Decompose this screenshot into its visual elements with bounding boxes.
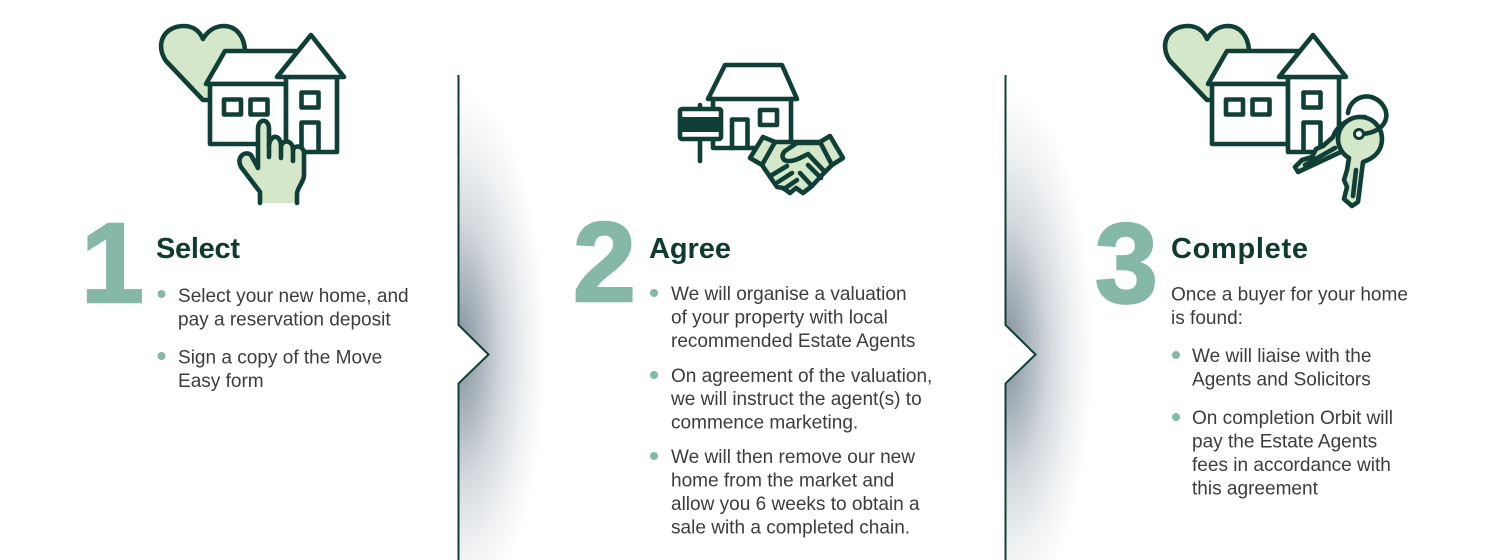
intro text: is found:	[1171, 308, 1243, 329]
bullet list: select: Easy form	[178, 371, 264, 392]
bullet list: select: Select your new home, and	[178, 286, 409, 307]
bullet list: agree: commence marketing.	[671, 412, 858, 434]
bullet list: select	[158, 286, 409, 392]
bullet list: agree: We will then remove our new	[671, 447, 915, 468]
bullet list: complete: this agreement	[1192, 478, 1319, 500]
bullet list: complete: fees in accordance with	[1192, 455, 1391, 476]
number 2: 2	[573, 199, 636, 325]
bullet list: agree	[650, 284, 932, 538]
bullet list: agree: On agreement of the valuation,	[671, 366, 932, 387]
bullet list: select: Sign a copy of the Move	[178, 348, 382, 368]
bullet list: agree: sale with a completed chain.	[671, 518, 910, 538]
heading: Complete: Complete	[1171, 233, 1308, 265]
icon: house, sale board and handshake	[680, 65, 843, 193]
bullet list: complete: Agents and Solicitors	[1192, 370, 1371, 390]
panel: step 3 complete	[1095, 26, 1408, 500]
bullet list: agree: we will instruct the agent(s) to	[670, 389, 922, 410]
icon: heart, houses and keys	[1165, 26, 1386, 206]
bullet list: complete	[1172, 346, 1393, 500]
icon: heart, houses and pointing hand	[161, 26, 344, 203]
bullet list: agree: of your property with local	[671, 308, 888, 328]
bullet list: agree: recommended Estate Agents	[671, 331, 915, 352]
intro text: Once a buyer for your home	[1171, 284, 1408, 306]
divider: chevron between steps 1 and 2	[458, 75, 549, 560]
bullet list: complete: pay the Estate Agents	[1192, 432, 1377, 452]
intro text	[1171, 284, 1408, 329]
bullet list: agree: We will organise a valuation	[671, 284, 907, 305]
heading: Agree: Agree	[649, 233, 731, 265]
divider: chevron between steps 2 and 3	[1005, 75, 1096, 560]
number 1: 1	[81, 200, 144, 326]
panel: step 2 agree	[573, 65, 932, 538]
bullet list: agree: home from the market and	[671, 470, 894, 492]
bullet list: complete: We will liaise with the	[1192, 346, 1371, 367]
bullet list: select: pay a reservation deposit	[178, 310, 391, 330]
heading: Select: Select	[156, 233, 240, 265]
number 3: 3	[1095, 200, 1158, 326]
panel: step 1 select	[81, 26, 409, 392]
bullet list: complete: On completion Orbit will	[1192, 408, 1393, 429]
bullet list: agree: allow you 6 weeks to obtain a	[671, 494, 920, 515]
